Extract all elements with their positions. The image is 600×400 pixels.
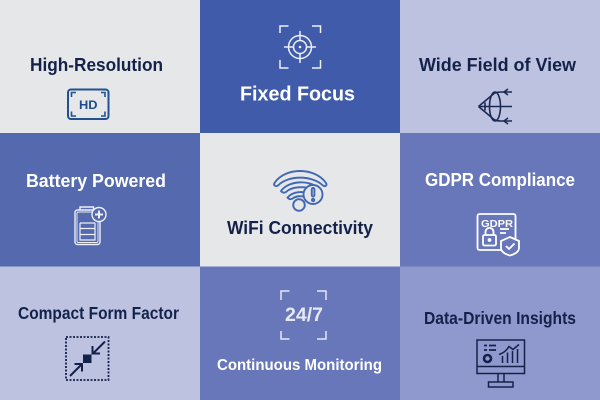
icon: 24/7 frame: 24/7 [285,304,323,326]
heading: Continuous Monitoring: Continuous Monitoring [217,357,382,374]
heading: Data-Driven Insights: Data-Driven Insights [424,308,576,328]
panel: WiFi Connectivity [200,133,400,266]
panel: Wide Field of View [400,0,600,133]
icon: GDPR lock and shield: GDPR [481,219,514,230]
heading: WiFi Connectivity: WiFi Connectivity [227,218,373,238]
heading: Fixed Focus: Fixed Focus [240,83,355,106]
icon: HD frame [68,90,108,119]
icon: GDPR lock and shield [478,214,519,256]
icon: compact arrows [66,337,108,380]
icon: HD frame: HD [79,98,98,112]
heading: Battery Powered: Battery Powered [26,171,166,191]
icon: wide-angle lens [478,89,512,124]
icon: analytics monitor [477,340,524,387]
panel: High-Resolution [0,0,200,133]
panel: Data-Driven Insights [400,266,600,400]
heading: GDPR Compliance: GDPR Compliance [425,170,575,190]
heading: Compact Form Factor: Compact Form Factor [18,303,179,323]
icon: WiFi warning [274,171,326,211]
heading: High-Resolution: High-Resolution [30,55,163,75]
panel: GDPR Compliance [400,133,600,266]
panel: Compact Form Factor [0,266,200,400]
panel: Continuous Monitoring [200,266,400,400]
icon: battery with plus [75,207,106,244]
icon: focus target [280,26,320,68]
heading: Wide Field of View: Wide Field of View [419,55,577,75]
icon: 24/7 frame [281,291,326,339]
panel: Battery Powered [0,133,200,266]
panel: Fixed Focus [200,0,400,133]
